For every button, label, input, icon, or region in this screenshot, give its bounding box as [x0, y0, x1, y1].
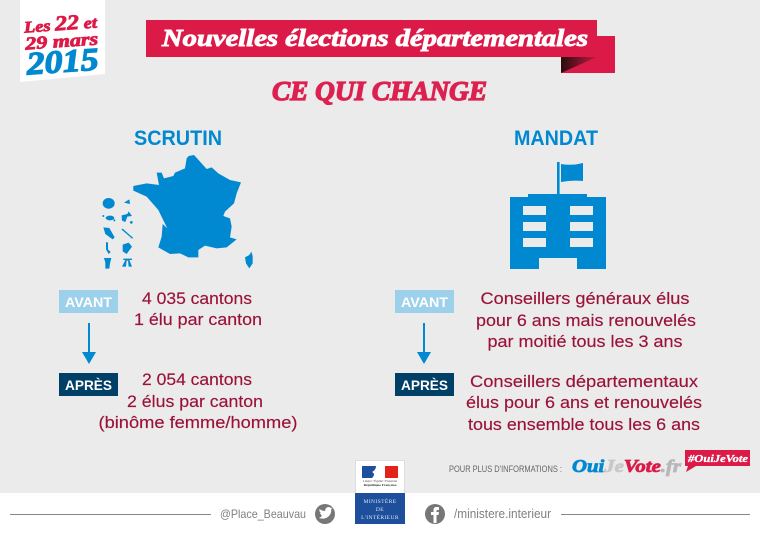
title ribbon — [146, 20, 615, 73]
avant text: 1 élu par canton — [134, 311, 262, 329]
icon: twitter — [315, 504, 335, 524]
arrow — [417, 323, 431, 364]
ministry logo: République Française — [364, 483, 397, 487]
panel: scrutin comparison — [59, 290, 298, 432]
arrow — [82, 323, 96, 364]
apres text: tous ensemble tous les 6 ans — [468, 416, 700, 434]
heading: mandat: MANDAT — [514, 127, 598, 150]
avant text: pour 6 ans mais renouvelés — [476, 312, 696, 330]
apres text — [98, 371, 298, 432]
ministry logo: Liberté • Égalité • Fraternité — [363, 478, 398, 483]
avant text: Conseillers généraux élus — [480, 290, 690, 308]
apres text: (binôme femme/homme) — [98, 414, 298, 432]
ouijevote logo: OuiJeVote .fr — [572, 456, 682, 476]
apres text: 2 054 cantons — [142, 371, 252, 389]
twitter handle: @Place_Beauvau — [220, 507, 306, 521]
apres text — [466, 373, 702, 434]
footer band — [0, 493, 760, 534]
avant badge — [395, 290, 454, 313]
date badge: 29 mars — [23, 29, 99, 54]
icon: map of France and overseas territories — [102, 155, 253, 269]
ministry logo — [355, 460, 405, 524]
title ribbon: Nouvelles élections départementales — [161, 26, 588, 52]
heading: scrutin: SCRUTIN — [134, 127, 222, 150]
avant badge: AVANT — [401, 294, 448, 310]
avant text — [476, 290, 696, 351]
apres badge: APRÈS — [401, 377, 448, 393]
apres badge: APRÈS — [65, 377, 112, 393]
apres text: Conseillers départementaux — [470, 373, 699, 391]
avant text — [134, 290, 262, 329]
avant badge — [59, 290, 118, 313]
apres text: élus pour 6 ans et renouvelés — [466, 394, 702, 412]
hashtag bubble: #OuiJeVote — [687, 453, 748, 465]
panel: mandat comparison — [395, 290, 702, 434]
apres badge — [395, 373, 454, 396]
avant text: 4 035 cantons — [142, 290, 252, 308]
apres text: 2 élus par canton — [127, 393, 263, 411]
ministry logo: L'INTÉRIEUR — [361, 513, 399, 521]
apres badge — [59, 373, 118, 396]
facebook handle: /ministere.interieur — [454, 506, 552, 521]
date badge: Les 22 et — [22, 9, 98, 38]
icon: facebook — [425, 504, 445, 524]
more information label: POUR PLUS D'INFORMATIONS : — [449, 464, 562, 474]
icon: building with flag — [510, 162, 606, 269]
avant badge: AVANT — [65, 294, 112, 310]
subtitle: CE QUI CHANGE — [272, 76, 487, 106]
ministry logo: MINISTÈRE — [364, 497, 397, 505]
avant text: par moitié tous les 3 ans — [488, 333, 682, 351]
date badge: 2015 — [24, 41, 100, 82]
ministry logo: DE — [376, 507, 384, 513]
date badge — [20, 0, 105, 82]
hashtag bubble — [685, 450, 750, 472]
